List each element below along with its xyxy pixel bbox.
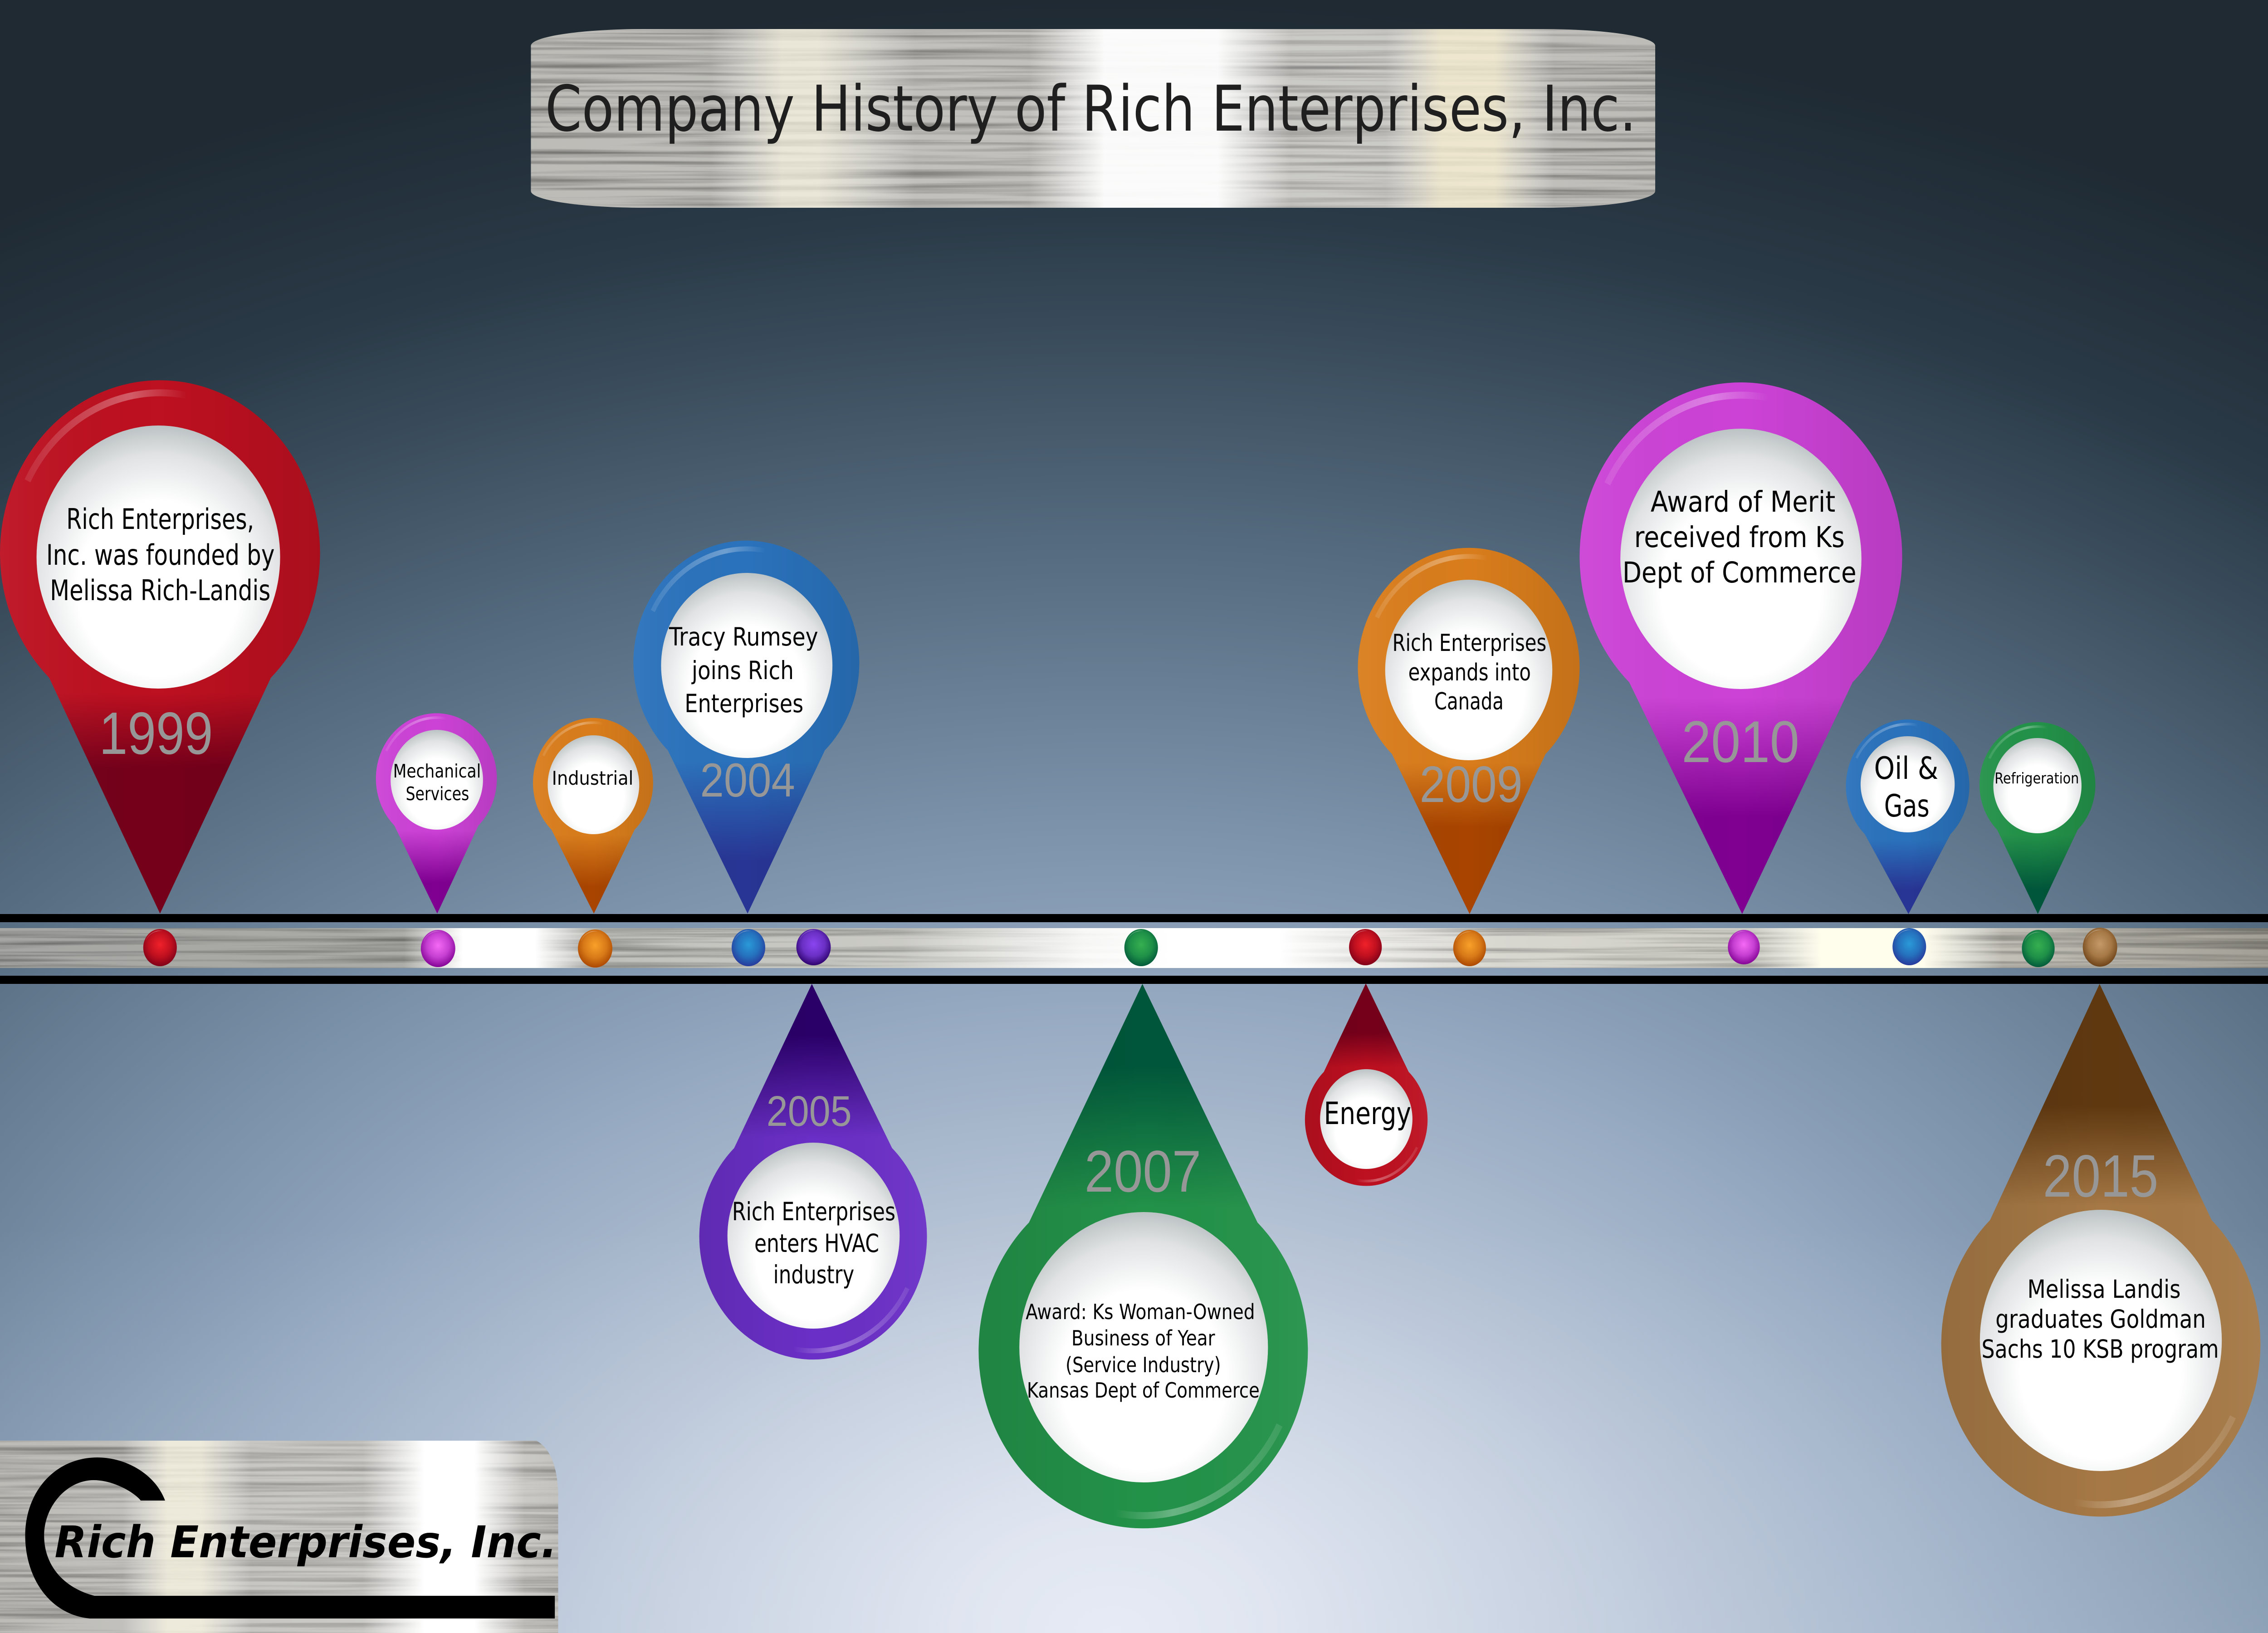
label: [393, 761, 481, 805]
event text: [1623, 486, 1857, 590]
event text: Business of Year: [1071, 1326, 1215, 1350]
event text: industry: [773, 1261, 854, 1289]
year 2010: 2010: [1681, 709, 1799, 775]
pin: 1999 founding: [0, 380, 320, 914]
event text: [1982, 1275, 2219, 1364]
logo mark: [25, 1457, 555, 1618]
pin: 2005: [699, 984, 927, 1359]
label: [1874, 751, 1938, 824]
logo text: Rich Enterprises, Inc.: [54, 1517, 557, 1568]
title: Company History of Rich Enterprises, Inc.: [545, 72, 1636, 146]
event text: Melissa Landis: [2027, 1275, 2180, 1304]
label: Industrial: [552, 767, 633, 789]
event text: graduates Goldman: [1995, 1305, 2206, 1334]
founding text: [46, 504, 275, 607]
founding text: Inc. was founded by: [46, 539, 275, 572]
event text: [732, 1198, 895, 1289]
pin: 2009: [1358, 548, 1579, 914]
year 2015: 2015: [2043, 1143, 2158, 1209]
event text: Award of Merit: [1651, 486, 1835, 519]
pin: Refrigeration: [1980, 722, 2095, 914]
event text: joins Rich: [691, 656, 794, 685]
pin: 2015: [1941, 984, 2260, 1516]
event text: Rich Enterprises: [732, 1198, 895, 1226]
event text: Tracy Rumsey: [669, 623, 818, 651]
year 2009: 2009: [1420, 756, 1522, 813]
label: Mechanical: [393, 761, 481, 782]
label: Gas: [1884, 788, 1930, 824]
label: Energy: [1324, 1096, 1411, 1132]
label: Refrigeration: [1994, 770, 2079, 787]
event text: Kansas Dept of Commerce: [1027, 1379, 1260, 1403]
pin: Energy: [1305, 983, 1427, 1186]
founding text: Melissa Rich-Landis: [50, 575, 270, 607]
event text: [1026, 1300, 1260, 1403]
event text: Award: Ks Woman-Owned: [1026, 1300, 1255, 1324]
event text: Enterprises: [684, 689, 803, 718]
event text: enters HVAC: [754, 1229, 879, 1258]
event text: Canada: [1434, 687, 1504, 715]
year 2005: 2005: [767, 1087, 852, 1135]
label: Oil &: [1874, 751, 1938, 787]
event text: Rich Enterprises: [1392, 629, 1546, 656]
pin: Industrial: [533, 718, 653, 914]
label: Services: [406, 783, 469, 805]
pin: Mechanical Services: [376, 713, 497, 914]
year 2004: 2004: [700, 754, 795, 807]
event text: [669, 623, 818, 718]
title plate: [531, 29, 1655, 208]
event text: expands into: [1408, 658, 1531, 686]
timeline dots: [143, 928, 2117, 968]
year 1999: 1999: [99, 700, 213, 767]
year 2007: 2007: [1085, 1139, 1201, 1204]
pin: 2010: [1579, 382, 1902, 914]
pin: 2004: [633, 541, 859, 914]
event text: Sachs 10 KSB program: [1982, 1335, 2219, 1364]
event text: [1392, 629, 1546, 715]
founding text: Rich Enterprises,: [66, 504, 254, 536]
logo plate: [0, 1441, 558, 1633]
event text: received from Ks: [1634, 521, 1845, 554]
event text: (Service Industry): [1066, 1353, 1221, 1377]
timeline rail: [0, 914, 2268, 984]
pin: 2007: [978, 984, 1308, 1528]
pin: Oil & Gas: [1846, 719, 1970, 914]
event text: Dept of Commerce: [1623, 557, 1857, 590]
